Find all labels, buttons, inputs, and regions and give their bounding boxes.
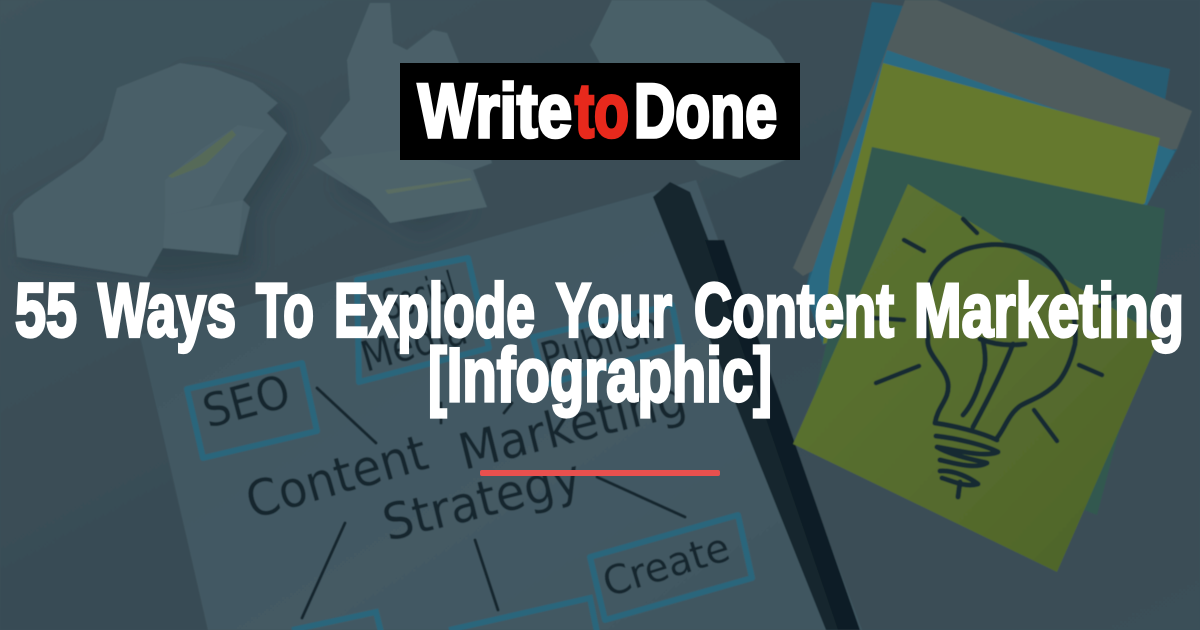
logo: Write to Done bbox=[400, 63, 800, 160]
notebook box: Social Media: Media bbox=[355, 305, 473, 382]
sticky notes stack with light bulb bbox=[793, 0, 1192, 572]
crumpled paper: top right, behind logo bbox=[590, 0, 785, 178]
crumpled paper: centre bbox=[313, 3, 492, 235]
notebook text: Content Marketing Strategy bbox=[239, 369, 692, 553]
note: yellow green bbox=[823, 63, 1160, 344]
notebook box: Social Media: Social bbox=[377, 262, 462, 330]
notebook connector lines bbox=[302, 388, 685, 618]
title: [Infographic] bbox=[428, 333, 772, 418]
red underline bbox=[480, 470, 720, 476]
note: grey bbox=[793, 0, 1192, 276]
logo: Write to Done: Write bbox=[418, 69, 572, 154]
title: Your bbox=[556, 268, 672, 354]
crumpled paper: left bbox=[13, 63, 300, 280]
note: blue bbox=[806, 50, 1175, 345]
notebook box: SEO: SEO bbox=[197, 364, 296, 439]
notebook page bbox=[140, 180, 862, 630]
notebook boxes: bottom, cropped bbox=[292, 598, 597, 630]
logo: Write to Done: to bbox=[575, 69, 629, 154]
note: teal bbox=[813, 147, 1165, 515]
icon: light bulb rays bbox=[874, 219, 1116, 441]
notebook text: Content Marketing Strategy: Strategy bbox=[377, 447, 587, 553]
note: blue back bbox=[805, 2, 1177, 345]
pen bbox=[653, 182, 860, 630]
notebook box: SEO bbox=[187, 363, 317, 458]
notebook box: Create bbox=[590, 515, 752, 620]
logo: Write to Done: Done bbox=[634, 69, 777, 154]
title: Explode bbox=[334, 268, 535, 354]
title: 55 bbox=[15, 268, 77, 354]
notebook text: Content Marketing Strategy: Marketing bbox=[453, 369, 692, 482]
title bbox=[15, 268, 1184, 418]
title: To bbox=[256, 268, 314, 354]
notebook box: Social Media bbox=[355, 258, 489, 382]
note: bulb bbox=[793, 184, 1160, 572]
notebook box: Publish: Publish bbox=[535, 302, 666, 383]
title: Ways bbox=[98, 268, 236, 354]
notebook text: Content Marketing Strategy: Content bbox=[239, 424, 434, 531]
title: Content bbox=[694, 268, 894, 354]
notebook box: Create: Create bbox=[597, 525, 735, 607]
icon: light bulb drawing bbox=[926, 245, 1076, 497]
